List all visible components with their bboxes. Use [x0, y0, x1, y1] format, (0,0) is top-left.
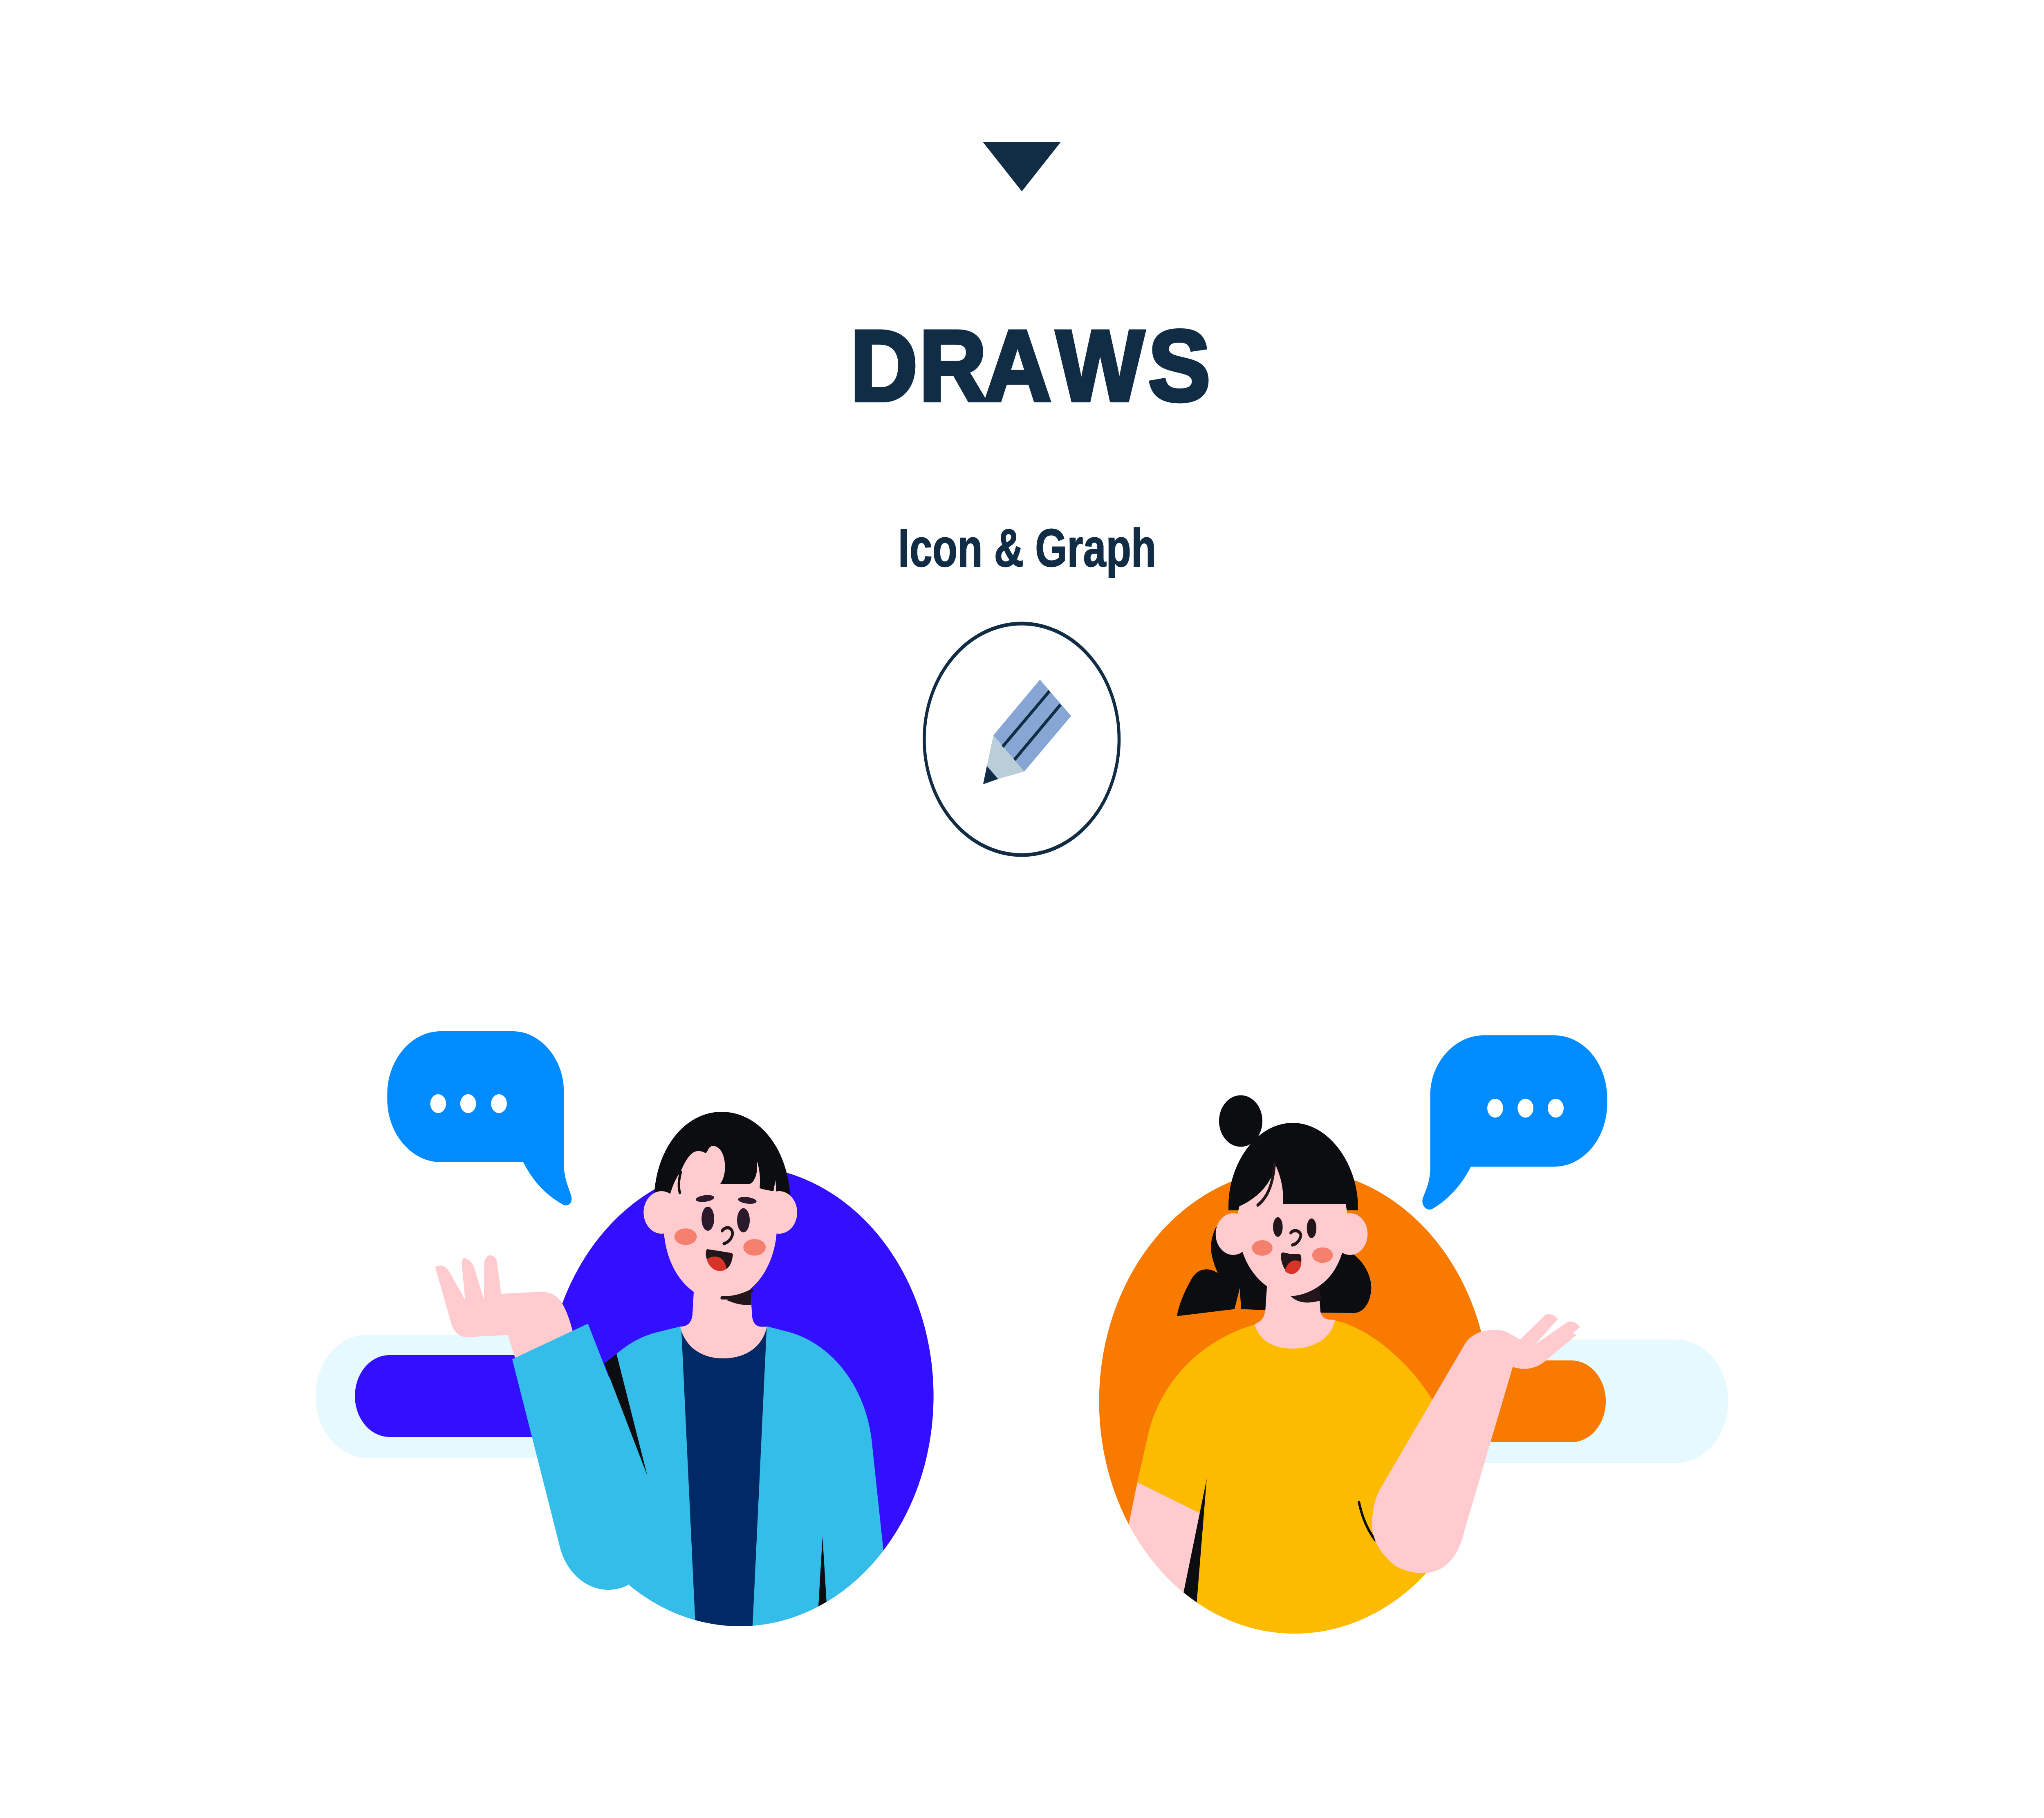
raised arm: woman	[1372, 1314, 1580, 1573]
raised sleeve	[512, 1324, 654, 1590]
speech bubble: woman	[1422, 1035, 1607, 1210]
mouth: woman	[1281, 1252, 1301, 1274]
illustration: woman with speech bubble	[1099, 1035, 1728, 1677]
torso: yellow shirt	[1129, 1320, 1432, 1634]
background circle: man	[546, 1166, 934, 1626]
back hair: woman	[1177, 1227, 1371, 1316]
head: woman	[1216, 1095, 1367, 1349]
sleeve fold	[1359, 1502, 1375, 1540]
hair bun	[1219, 1095, 1262, 1147]
face: woman	[1232, 1165, 1351, 1296]
cheeks: man	[675, 1228, 766, 1256]
subtitle: Icon & Graph	[898, 518, 1156, 578]
chin shadow: woman	[1291, 1286, 1321, 1303]
icon: pencil in circle	[924, 624, 1119, 855]
raised hand: man	[435, 1255, 578, 1362]
ears: woman	[1216, 1213, 1367, 1255]
neck: woman	[1255, 1284, 1335, 1349]
hair strand: man	[679, 1172, 681, 1193]
cheeks: woman	[1252, 1240, 1333, 1263]
ears: man	[643, 1191, 797, 1234]
progress pill: woman side	[1274, 1340, 1728, 1463]
head: man	[643, 1112, 797, 1358]
hair dome: woman	[1228, 1123, 1358, 1210]
neck: man	[680, 1288, 767, 1358]
torso: jacket and shirt	[609, 1326, 883, 1626]
background circle: woman	[1099, 1169, 1490, 1634]
eyebrows: man	[695, 1194, 757, 1205]
illustration: man with speech bubble	[316, 1031, 934, 1640]
title: DRAWS	[850, 310, 1210, 422]
mouth: man	[706, 1249, 733, 1271]
chin shadow: man	[722, 1291, 752, 1305]
face: man	[664, 1146, 777, 1298]
hair: man	[654, 1112, 790, 1200]
nose: man	[722, 1228, 733, 1244]
arrow: down triangle	[983, 142, 1060, 191]
shoulder fold	[604, 1354, 648, 1476]
eyes: man	[702, 1207, 750, 1232]
progress pill: man side	[316, 1335, 729, 1458]
hair strand: woman	[1258, 1163, 1275, 1205]
nose: woman	[1291, 1231, 1301, 1245]
eyes: woman	[1273, 1217, 1316, 1238]
speech bubble: man	[387, 1031, 572, 1205]
